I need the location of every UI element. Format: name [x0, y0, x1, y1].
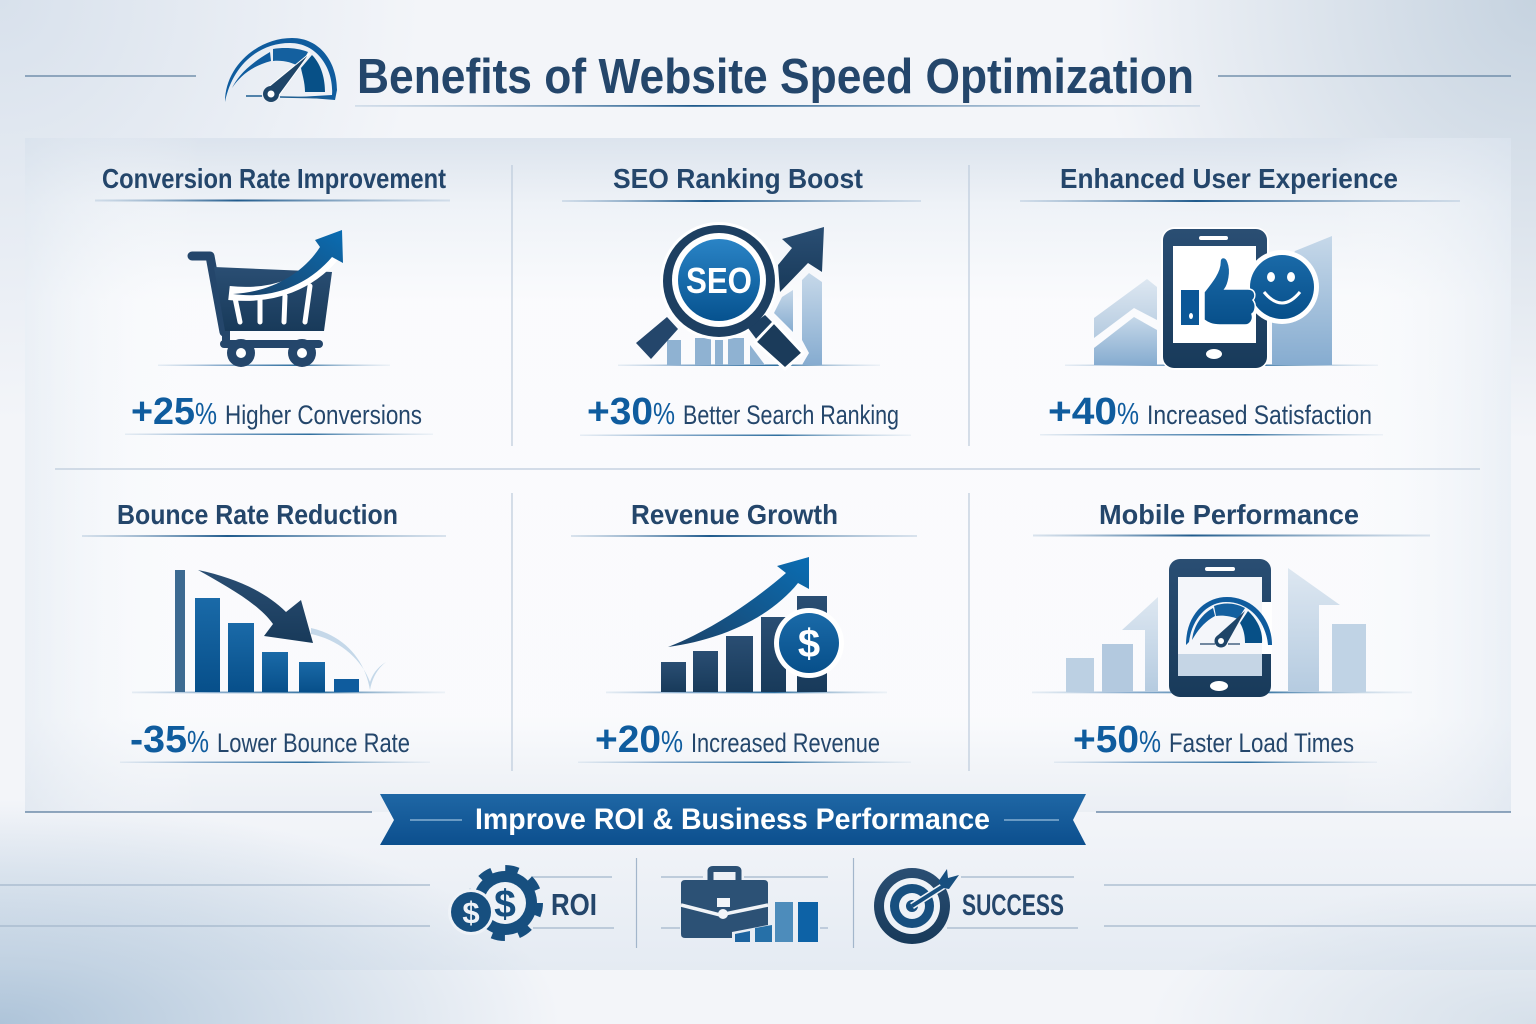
panel: revenue growth	[571, 499, 917, 763]
grid dividers	[55, 165, 1480, 771]
banner: improve roi	[380, 794, 1086, 845]
panel: enhanced user experience	[1020, 163, 1460, 436]
stat: load times	[1054, 719, 1377, 763]
panel: bounce rate reduction	[82, 499, 446, 763]
icon: revenue bars with dollar coin	[661, 557, 844, 692]
panel: mobile performance	[1032, 499, 1430, 763]
stat: conversions	[125, 391, 433, 435]
panel: conversion rate improvement	[95, 163, 450, 435]
icon: magnifier with seo and rising chart: SEO	[686, 260, 752, 301]
icon: falling bar chart with arrow	[175, 570, 386, 692]
main content panel	[25, 138, 1511, 812]
stat: bounce: %	[187, 724, 209, 759]
icon: shopping cart with arrow	[192, 230, 343, 367]
title: Benefits of Website Speed Optimization	[357, 50, 1194, 104]
roi group	[448, 869, 597, 937]
stat: bounce: Lower Bounce Rate	[217, 728, 410, 758]
icon: revenue bars with dollar coin: $	[798, 622, 820, 666]
label: success: SUCCESS	[962, 889, 1064, 922]
stat: revenue: Increased Revenue	[691, 728, 880, 758]
heading: mobile: Mobile Performance	[1099, 499, 1359, 530]
icon: speedometer gauge	[225, 38, 337, 102]
icon: gear with dollar coins: $	[462, 895, 480, 930]
banner: improve roi: Improve ROI & Business Performance	[475, 803, 990, 836]
icon: magnifier with seo and rising chart	[636, 222, 824, 369]
heading: bounce: Bounce Rate Reduction	[117, 499, 398, 530]
label: roi: ROI	[551, 887, 597, 922]
stat: load times: Faster Load Times	[1169, 728, 1354, 758]
stat: load times: %	[1139, 724, 1161, 759]
icon: phone with speedometer	[1066, 559, 1366, 697]
stat: satisfaction: %	[1117, 396, 1139, 431]
stat: bounce	[120, 719, 430, 763]
stat: search ranking: %	[653, 396, 675, 431]
heading: seo: SEO Ranking Boost	[613, 163, 863, 194]
stat: search ranking: Better Search Ranking	[683, 400, 899, 430]
heading: conversion: Conversion Rate Improvement	[102, 163, 446, 194]
stat: conversions: %	[195, 396, 217, 431]
stat: search ranking	[580, 391, 911, 436]
stat: satisfaction: +40	[1048, 391, 1117, 433]
stat: satisfaction: Increased Satisfaction	[1147, 400, 1372, 430]
stat: revenue: +20	[595, 719, 661, 761]
panel: seo ranking boost	[562, 163, 921, 436]
success group	[874, 868, 1064, 944]
stat: search ranking: +30	[587, 391, 653, 433]
icon: target with arrow	[874, 868, 959, 944]
icon: gear with dollar coins	[448, 869, 539, 937]
stat: load times: +50	[1073, 719, 1139, 761]
icon: gear with dollar coins: $	[494, 883, 516, 926]
stat: revenue: %	[661, 724, 683, 759]
header	[25, 38, 1511, 107]
heading: ux: Enhanced User Experience	[1060, 163, 1398, 194]
stat: bounce: -35	[130, 719, 187, 761]
stat: satisfaction	[1040, 391, 1383, 436]
stat: revenue	[578, 719, 911, 763]
icon: phone with thumbs up and smiley	[1094, 227, 1332, 370]
heading: revenue: Revenue Growth	[631, 499, 838, 530]
bottom decorative lines	[0, 858, 1536, 948]
stat: conversions: +25	[131, 391, 195, 433]
stat: conversions: Higher Conversions	[225, 400, 422, 430]
icon: briefcase with bars	[681, 869, 818, 942]
bottom rules	[25, 811, 1511, 813]
